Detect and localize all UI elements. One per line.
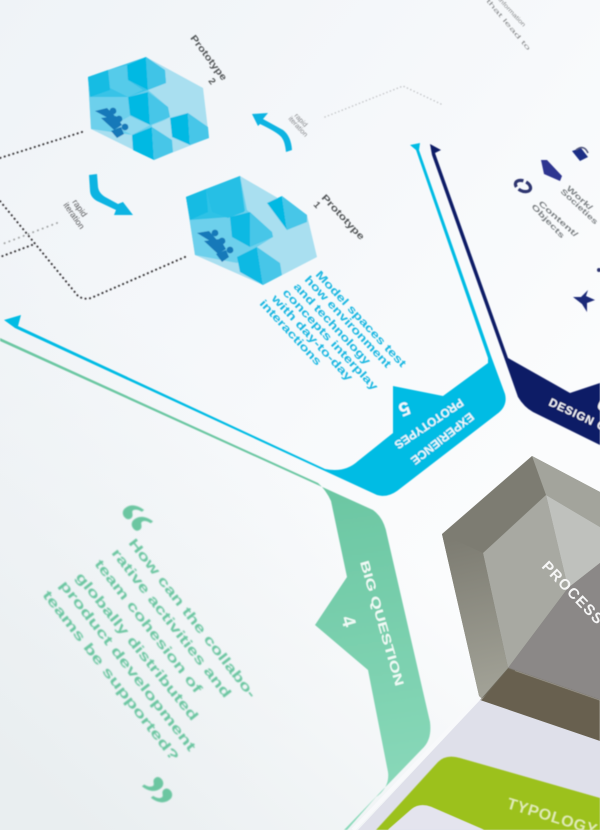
quote: big question (40, 488, 259, 830)
icon: people (95, 108, 128, 138)
arrow: prototype 2 to 1 (89, 174, 133, 215)
dotted connector lines (0, 86, 443, 299)
label: prototype 2 (188, 33, 229, 87)
panel: lower page (353, 697, 600, 830)
label: rapid iteration left: iteration (61, 200, 87, 231)
icon: content object (514, 178, 532, 194)
label: prototype 1: Prototype (319, 193, 366, 242)
hexagon: prototype 2 (88, 57, 209, 160)
label: work/societies: Content/ (537, 199, 581, 240)
label: work/societies (530, 184, 600, 240)
text: model spaces description: how environment (302, 274, 393, 371)
inner panel (388, 805, 484, 830)
text: model spaces description: interactions (257, 298, 324, 368)
quote: big question: rative activities and (109, 546, 234, 701)
quote: big question: How can the collabo- (126, 536, 259, 701)
text: model spaces description (257, 269, 408, 394)
icon: people (197, 230, 233, 262)
opening quotation mark: “ (88, 488, 165, 559)
step label: experience prototypes: PROTOTYPES (392, 396, 466, 452)
step number 5: 5 (395, 396, 413, 420)
step label: experience prototypes: EXPERIENCE (408, 410, 477, 467)
quote: big question: product development (57, 578, 199, 755)
label: work/societies: Objects (530, 202, 567, 240)
icon: lock (572, 148, 588, 161)
hexagon: prototype 1 (186, 176, 317, 285)
label: work/societies: Work/ (565, 184, 596, 213)
icon: clipped mark (597, 268, 600, 272)
text: model spaces description: concepts interplay (280, 287, 381, 394)
shape: big question step 4 (0, 338, 430, 830)
label: work/societies: Societies (559, 187, 600, 226)
panel: process hexagon (442, 456, 600, 742)
top right clipped text (484, 0, 532, 53)
label: prototype 1: 1 (311, 200, 323, 211)
label: prototype 1 (311, 193, 366, 242)
text: model spaces description: Model spaces test (313, 269, 408, 370)
quote: big question: team cohesion of (92, 557, 205, 696)
shape: typology panel (376, 757, 600, 830)
label: prototype 2: 2 (206, 76, 218, 87)
label: rapid iteration right: rapid (293, 113, 308, 129)
quote: big question: teams be supported? (40, 588, 182, 764)
label: rapid iteration left: rapid (70, 197, 90, 219)
step label: experience prototypes (392, 396, 477, 467)
step label: big question: BIG QUESTION (357, 559, 406, 688)
icon: star (573, 290, 595, 312)
icons and labels: design elements (514, 148, 600, 312)
quote: big question: globally distributed (73, 569, 201, 723)
text: model spaces description: with day-to-day (268, 292, 355, 385)
page crease highlight (353, 697, 480, 830)
icon: work figure (541, 160, 562, 181)
step number 4: 4 (336, 614, 359, 630)
arrow: prototype 1 to 2 (252, 113, 292, 152)
label: rapid iteration right: iteration (287, 116, 309, 139)
label: prototype 2: Prototype (188, 33, 229, 83)
shape: design step 6 (430, 144, 600, 445)
text: model spaces description: and technology (291, 281, 373, 368)
shape: experience prototypes step 5 (4, 143, 506, 496)
